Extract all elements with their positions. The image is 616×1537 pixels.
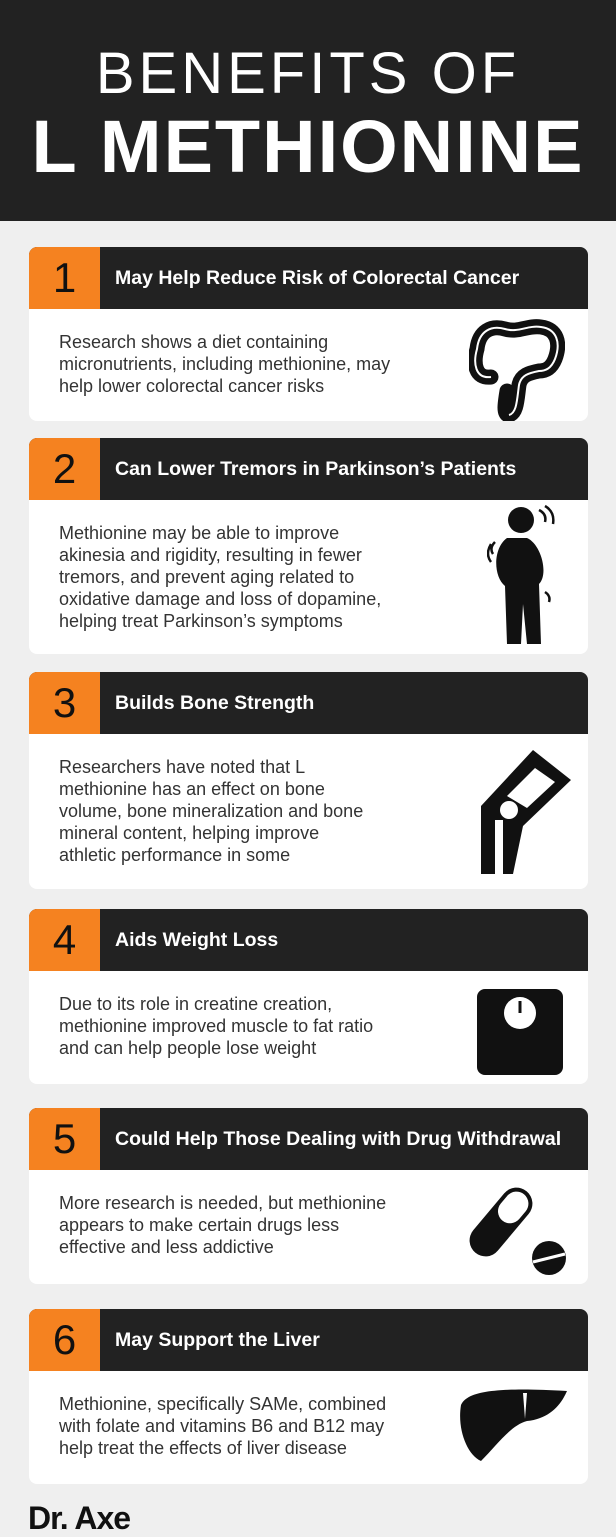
panel: card 2: [29, 438, 588, 654]
card 1 header: 1: [53, 254, 76, 301]
icon: knee joint: [481, 750, 571, 874]
card 6 header: [29, 1309, 588, 1371]
card 4 header: Aids Weight Loss: [115, 929, 278, 951]
card 3 text: volume, bone mineralization and bone: [59, 801, 363, 821]
card 3 header: Builds Bone Strength: [115, 692, 314, 714]
panel: card 6: [29, 1309, 588, 1484]
card 1 text: micronutrients, including methionine, may: [59, 354, 390, 374]
card 1 text: [59, 332, 390, 396]
card 5 header: Could Help Those Dealing with Drug Withdrawal: [115, 1128, 561, 1150]
card 1 text: help lower colorectal cancer risks: [59, 376, 324, 396]
card 1 header: [29, 247, 588, 309]
card 2 header: [29, 438, 588, 500]
panel: card 5: [29, 1108, 588, 1284]
card 3 text: mineral content, helping improve: [59, 823, 319, 843]
card 2 text: [59, 523, 381, 631]
card 4 header: [29, 909, 588, 971]
icon: scale: [477, 989, 563, 1075]
card 2 text: akinesia and rigidity, resulting in fewer: [59, 545, 362, 565]
card 4 header: 4: [53, 916, 76, 963]
card 2 header: Can Lower Tremors in Parkinson’s Patients: [115, 458, 516, 480]
title line 1: BENEFITS OF: [96, 41, 520, 106]
icon: colon: [469, 319, 565, 421]
card 5 text: effective and less addictive: [59, 1237, 274, 1257]
card 3 header: [29, 672, 588, 734]
title line 2: L METHIONINE: [32, 105, 584, 188]
card 3 header: 3: [53, 679, 76, 726]
panel: card 3: [29, 672, 588, 889]
card 6 text: help treat the effects of liver disease: [59, 1438, 347, 1458]
card 6 header: May Support the Liver: [115, 1329, 320, 1351]
card 3 text: methionine has an effect on bone: [59, 779, 325, 799]
card 2 text: Methionine may be able to improve: [59, 523, 339, 543]
card 6 text: Methionine, specifically SAMe, combined: [59, 1394, 386, 1414]
card 1 header: May Help Reduce Risk of Colorectal Cancer: [115, 267, 519, 289]
panel: card 4: [29, 909, 588, 1084]
card 2 header: 2: [53, 445, 76, 492]
icon: pills: [470, 1188, 566, 1275]
card 1 text: Research shows a diet containing: [59, 332, 328, 352]
logo: Dr. Axe: [28, 1500, 130, 1536]
icon: person with tremor: [487, 504, 555, 644]
card 2 text: oxidative damage and loss of dopamine,: [59, 589, 381, 609]
card 6 text: [59, 1394, 386, 1458]
card 3 text: Researchers have noted that L: [59, 757, 305, 777]
card 4 text: and can help people lose weight: [59, 1038, 316, 1058]
card 2 text: helping treat Parkinson’s symptoms: [59, 611, 343, 631]
card 6 text: with folate and vitamins B6 and B12 may: [59, 1416, 384, 1436]
card 5 header: [29, 1108, 588, 1170]
card 3 text: athletic performance in some: [59, 845, 290, 865]
card 4 text: Due to its role in creatine creation,: [59, 994, 332, 1014]
card 3 text: [59, 757, 363, 865]
panel: card 1: [29, 247, 588, 421]
card 2 text: tremors, and prevent aging related to: [59, 567, 354, 587]
card 5 text: appears to make certain drugs less: [59, 1215, 339, 1235]
card 5 header: 5: [53, 1115, 76, 1162]
card 5 text: More research is needed, but methionine: [59, 1193, 386, 1213]
card 5 text: [59, 1193, 386, 1257]
card 6 header: 6: [53, 1316, 76, 1363]
icon: liver: [460, 1390, 567, 1461]
card 4 text: methionine improved muscle to fat ratio: [59, 1016, 373, 1036]
header: [0, 0, 616, 221]
card 4 text: [59, 994, 373, 1058]
